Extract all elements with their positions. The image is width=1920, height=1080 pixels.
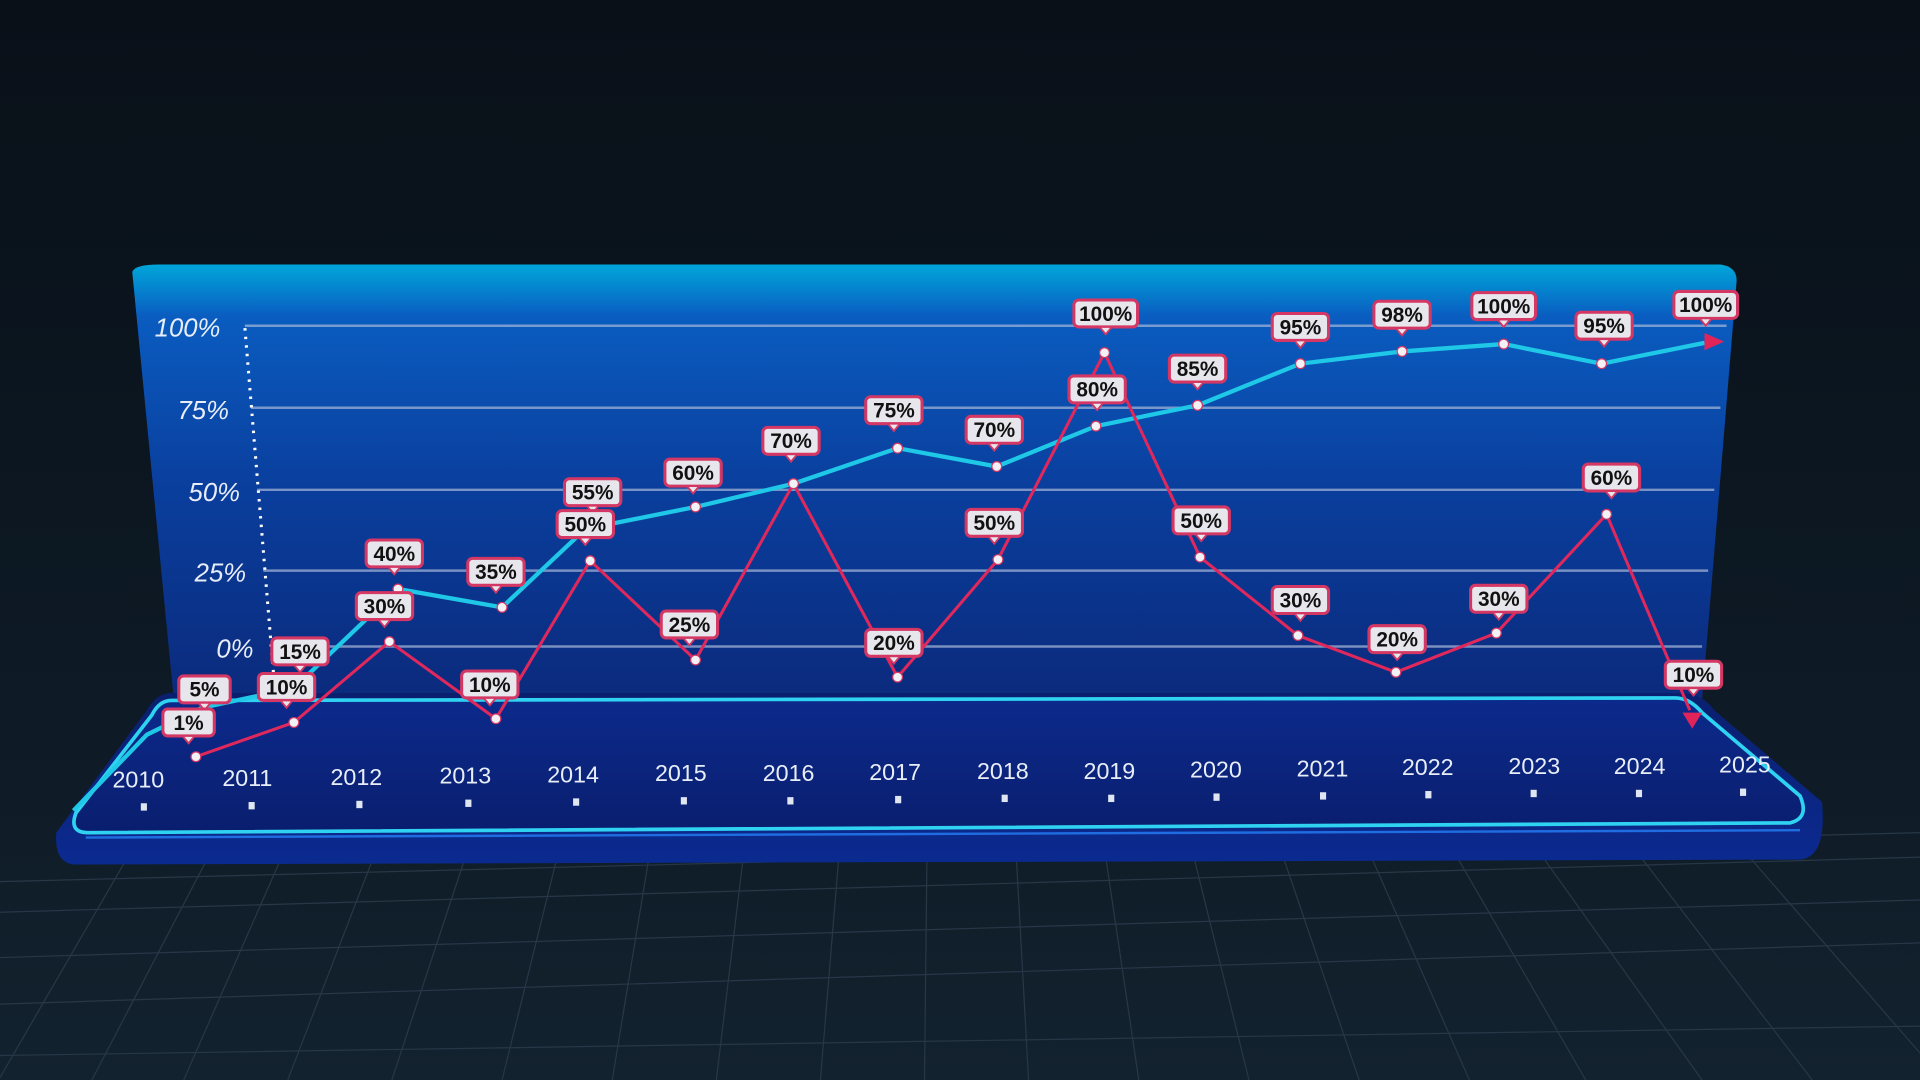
data labels: 25% xyxy=(669,614,710,637)
y axis labels: 100% xyxy=(155,315,220,343)
data labels: 95% xyxy=(1583,315,1625,338)
year labels: 2025 xyxy=(1719,752,1771,778)
data labels: 60% xyxy=(672,462,714,485)
data labels: 85% xyxy=(1177,358,1218,381)
back panel xyxy=(132,264,1737,700)
year labels: 2016 xyxy=(763,760,814,786)
year labels: 2011 xyxy=(222,765,272,791)
data labels: 100% xyxy=(1679,294,1732,317)
data labels: 80% xyxy=(1076,379,1118,402)
data labels: 50% xyxy=(973,512,1015,535)
data labels: 50% xyxy=(1180,510,1222,533)
year labels: 2022 xyxy=(1402,754,1454,780)
data labels: 40% xyxy=(373,543,415,566)
red line xyxy=(191,348,1702,762)
data labels: 100% xyxy=(1079,303,1132,326)
data labels: 30% xyxy=(1478,588,1520,611)
year labels: 2012 xyxy=(330,764,382,790)
year labels: 2017 xyxy=(869,759,921,785)
data labels: 95% xyxy=(1280,316,1321,339)
data labels: 20% xyxy=(873,632,915,655)
data labels: 30% xyxy=(364,595,405,618)
data labels: 15% xyxy=(279,641,321,664)
cyan line xyxy=(73,333,1724,811)
data labels: 100% xyxy=(1477,295,1530,318)
y axis labels: 75% xyxy=(178,397,229,425)
year labels: 2020 xyxy=(1190,757,1242,783)
base platform xyxy=(56,693,1823,864)
year labels: 2018 xyxy=(977,758,1029,784)
data labels: 10% xyxy=(266,676,307,699)
year labels: 2024 xyxy=(1614,753,1666,779)
year labels: 2015 xyxy=(655,760,707,786)
year labels: 2023 xyxy=(1508,753,1560,779)
year labels: 2021 xyxy=(1297,755,1348,781)
data labels: 10% xyxy=(469,674,511,697)
data labels: 50% xyxy=(564,513,606,536)
data labels: 98% xyxy=(1381,304,1423,327)
data labels: 30% xyxy=(1280,589,1321,612)
y axis labels: 0% xyxy=(216,636,253,664)
data labels: 70% xyxy=(770,430,812,453)
year labels: 2013 xyxy=(439,763,491,789)
gridlines xyxy=(245,326,1727,647)
data labels: 20% xyxy=(1376,629,1418,652)
data labels: 70% xyxy=(973,419,1015,442)
data labels xyxy=(163,291,1738,743)
y axis labels xyxy=(155,315,253,664)
year labels xyxy=(113,752,1771,811)
data labels: 60% xyxy=(1591,467,1632,490)
year labels: 2014 xyxy=(547,761,599,787)
data labels: 1% xyxy=(174,712,204,735)
data labels: 55% xyxy=(572,482,613,505)
data labels: 35% xyxy=(475,561,517,584)
floor grid xyxy=(0,833,1920,1080)
y axis labels: 25% xyxy=(194,560,246,588)
data labels: 75% xyxy=(873,400,915,423)
year labels: 2019 xyxy=(1084,758,1135,784)
y axis labels: 50% xyxy=(189,479,240,507)
data labels: 5% xyxy=(189,679,220,702)
year labels: 2010 xyxy=(113,766,164,792)
data labels: 10% xyxy=(1673,664,1714,687)
